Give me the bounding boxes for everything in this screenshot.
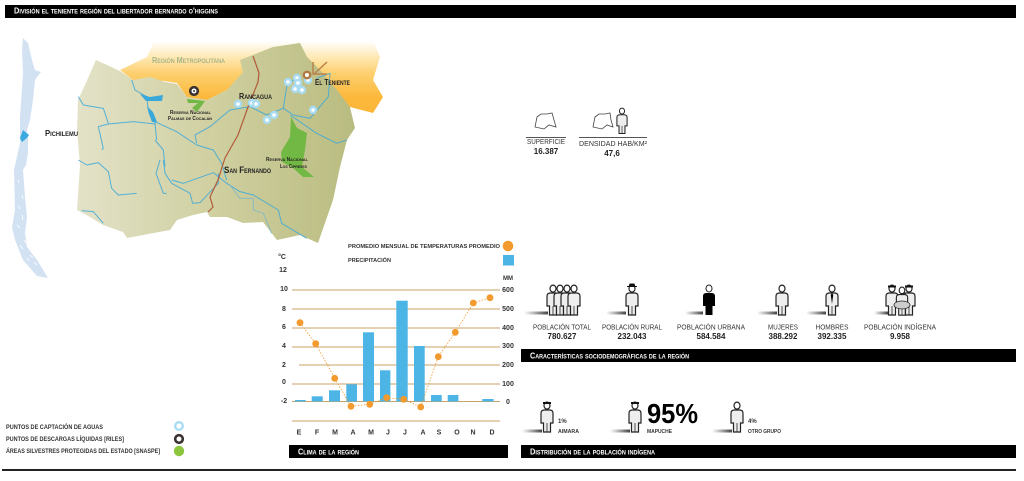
months: A <box>420 430 426 436</box>
map: place labels: Palmas de Cocalán <box>168 116 212 122</box>
left axis: °C <box>278 253 286 261</box>
mapuche: 95% <box>647 398 698 429</box>
density <box>579 108 648 158</box>
heading: sociodemographic <box>521 349 1016 362</box>
map legend: PUNTOS DE DESCARGAS LÍQUIDAS [RILES] <box>6 435 124 443</box>
right axis <box>502 276 514 406</box>
population rural: POBLACIÓN RURAL <box>602 322 662 332</box>
shadows <box>524 312 888 314</box>
left axis: 2 <box>282 362 286 369</box>
map: place labels: El Teniente <box>315 78 350 87</box>
left axis: 8 <box>282 306 286 313</box>
surface: 16.387 <box>534 147 559 156</box>
map: road <box>208 56 259 212</box>
bottom rule <box>2 469 1016 471</box>
map: Región Metropolitana orange area <box>120 33 383 113</box>
map: place labels: Los Cipreses <box>280 164 307 170</box>
chart legend: PROMEDIO MENSUAL DE TEMPERATURAS PROMEDIO <box>348 244 501 250</box>
left axis <box>278 253 288 405</box>
surface: SUPERFICIE <box>527 139 565 146</box>
months: J <box>403 430 407 436</box>
indigenous population: POBLACIÓN INDÍGENA <box>864 322 936 332</box>
population rural: 232.043 <box>618 332 647 341</box>
months: N <box>470 430 476 436</box>
density: DENSIDAD HAB/KM² <box>579 141 648 148</box>
map: place labels: Reserva Nacional <box>266 157 309 163</box>
left axis: -2 <box>281 398 287 405</box>
months: E <box>297 430 302 436</box>
map: highlighted region on Chile <box>20 130 29 142</box>
population urban <box>677 285 745 341</box>
population rural <box>602 284 662 341</box>
surface <box>526 113 566 156</box>
mapuche: MAPUCHE <box>647 429 672 435</box>
header: map section <box>5 5 1016 18</box>
aimara <box>541 402 579 435</box>
left axis: 6 <box>282 324 286 331</box>
map: place labels: San Fernando <box>224 165 271 175</box>
right axis: 0 <box>506 399 510 406</box>
mapuche <box>629 398 698 435</box>
climate chart <box>278 241 514 436</box>
map legend: ÁREAS SILVESTRES PROTEGIDAS DEL ESTADO [SNASPE] <box>6 448 160 455</box>
months: F <box>315 430 320 436</box>
right axis: 600 <box>502 287 514 294</box>
chart legend <box>348 241 514 266</box>
left axis: 0 <box>282 379 286 386</box>
map: lake <box>140 94 163 122</box>
right axis: MM <box>503 276 513 282</box>
population total: 780.627 <box>548 332 577 341</box>
left axis: 4 <box>282 343 286 350</box>
header: map section: División el teniente región del libertador bernardo o'higgins <box>14 6 218 16</box>
map: region O'Higgins land <box>77 43 355 243</box>
aimara: AIMARA <box>558 429 579 435</box>
men <box>816 285 849 341</box>
map legend: PUNTOS DE CAPTACIÓN DE AGUAS <box>6 423 103 431</box>
women: 388.292 <box>769 332 798 341</box>
heading: climate: Clima de la región <box>298 448 359 456</box>
map: water capture points <box>235 75 316 123</box>
otro grupo: OTRO GRUPO <box>748 429 782 435</box>
heading: climate <box>289 445 508 458</box>
map: El Teniente marker and arrow <box>304 62 327 78</box>
otro grupo <box>731 402 782 435</box>
right axis: 100 <box>502 381 514 388</box>
men: HOMBRES <box>816 324 849 332</box>
months: O <box>454 430 460 436</box>
months <box>297 430 495 436</box>
map: place labels: Reserva Nacional <box>170 110 212 116</box>
left axis: 12 <box>279 267 287 274</box>
months: D <box>489 430 495 436</box>
map: rivers <box>78 73 347 238</box>
map: national reserves <box>187 99 314 177</box>
population total <box>533 285 591 341</box>
population urban: 584.584 <box>697 332 726 341</box>
months: J <box>386 430 390 436</box>
chart legend: PRECIPITACIÓN <box>348 256 391 264</box>
left axis: 10 <box>280 286 288 293</box>
precipitation bars <box>295 301 494 402</box>
population total: POBLACIÓN TOTAL <box>533 322 591 332</box>
right axis: 400 <box>502 325 514 332</box>
map: place labels: Región Metropolitana <box>152 56 226 65</box>
months: M <box>332 430 338 436</box>
right axis: 200 <box>502 362 514 369</box>
indigenous distribution <box>522 398 782 435</box>
months: M <box>368 430 374 436</box>
men: 392.335 <box>818 332 847 341</box>
otro grupo: 4% <box>748 419 757 425</box>
indigenous population <box>864 285 936 341</box>
map: Chile locator <box>12 38 48 278</box>
sociodemographic figures <box>524 284 936 341</box>
surface and density stats <box>526 108 648 158</box>
population urban: POBLACIÓN URBANA <box>677 322 745 332</box>
map legend <box>6 422 184 456</box>
map: place labels: Rancagua <box>239 92 273 101</box>
map: liquid discharge point <box>190 87 198 95</box>
indigenous population: 9.958 <box>890 332 911 341</box>
aimara: 1% <box>558 419 567 425</box>
women <box>768 285 798 341</box>
heading: sociodemographic: Características sociodemográficas de la región <box>530 352 689 360</box>
temperature line <box>297 294 493 410</box>
heading: indigenous distribution <box>521 445 1016 458</box>
months: A <box>350 430 356 436</box>
right axis: 300 <box>502 343 514 350</box>
map: place labels: Pichilemu <box>45 129 78 138</box>
heading: indigenous distribution: Distribución de la población indígena <box>530 448 656 456</box>
right axis: 500 <box>502 306 514 313</box>
density: 47,6 <box>604 149 620 158</box>
map: place labels <box>45 56 350 175</box>
women: MUJERES <box>768 324 798 332</box>
months: S <box>437 430 442 436</box>
